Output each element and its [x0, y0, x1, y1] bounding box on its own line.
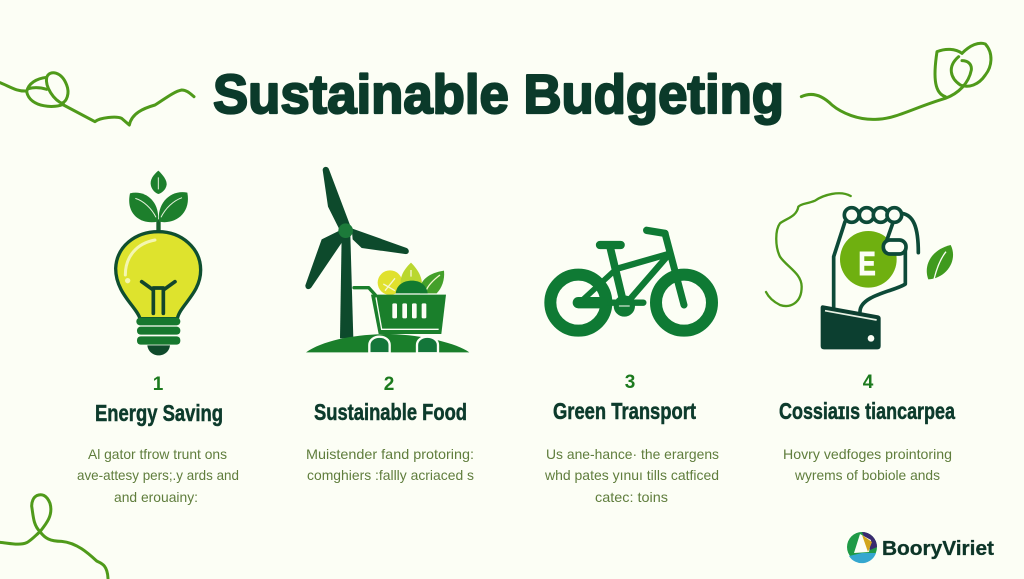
heading: Energy Saving: [95, 400, 223, 426]
leaf: [927, 245, 953, 279]
cuff: [821, 305, 881, 349]
number 2: 2: [384, 374, 394, 395]
vine: top left: [0, 73, 194, 125]
description: Us ane-hance· the erargens: [546, 446, 719, 462]
logo: [847, 532, 994, 563]
heading: Sustainable Food: [314, 399, 467, 425]
icon: hand holding energy coin: [766, 193, 953, 349]
column 2: sustainable food: [306, 374, 474, 483]
produce: [378, 270, 402, 295]
heading: Green Transport: [553, 398, 696, 424]
column 3: green transport: [544, 372, 719, 505]
column 4: conscious: [779, 372, 955, 483]
description: comghiers :fallly acriaced s: [307, 467, 474, 483]
bulb stem: [156, 219, 161, 233]
turbine blades: [305, 167, 409, 289]
description: Al gator tfrow trunt ons: [88, 446, 227, 462]
description: [544, 446, 719, 505]
cart basket: [354, 288, 375, 295]
icon: light bulb with sprout: [116, 171, 201, 355]
icon: wind turbine and shopping cart: [305, 167, 469, 353]
description: wyrems of bobiole ands: [794, 467, 940, 483]
logo wordmark: BooryViriet: [882, 538, 994, 560]
description: [77, 446, 239, 505]
vine: bottom left: [0, 495, 108, 578]
coin: [840, 231, 897, 288]
bulb base: [136, 318, 180, 345]
column 1: energy saving: [77, 374, 239, 505]
title: Sustainable Budgeting: [213, 63, 784, 125]
bulb highlight: [125, 240, 155, 275]
description: Muistender fand protoring:: [306, 446, 474, 462]
description: [783, 446, 952, 483]
ground: [306, 334, 469, 352]
turbine tower: [340, 235, 353, 338]
cart wheels: [369, 337, 438, 353]
bulb glass: [116, 232, 201, 319]
description: ave-attesy pers;.y ards and: [77, 467, 239, 483]
vine curl: [766, 193, 851, 306]
description: and erouainy:: [114, 489, 198, 505]
icon: hand holding energy coin: E: [858, 246, 876, 283]
logo mark: [847, 532, 877, 563]
hand outline: [834, 208, 918, 312]
icon: bicycle: [550, 230, 712, 331]
number 3: 3: [625, 372, 635, 393]
filament: [142, 282, 175, 313]
description: whd pates yınuı tills catficed: [544, 467, 719, 483]
number 4: 4: [863, 372, 874, 393]
vine: top right: [801, 43, 991, 119]
heading: Cossiaɪıs tiancarpea: [779, 398, 955, 424]
sprout leaves: [129, 171, 188, 222]
number 1: 1: [153, 374, 164, 395]
description: [306, 446, 474, 483]
description: Hovry vedfoges prointoring: [783, 446, 952, 462]
description: catec: toins: [595, 489, 668, 505]
